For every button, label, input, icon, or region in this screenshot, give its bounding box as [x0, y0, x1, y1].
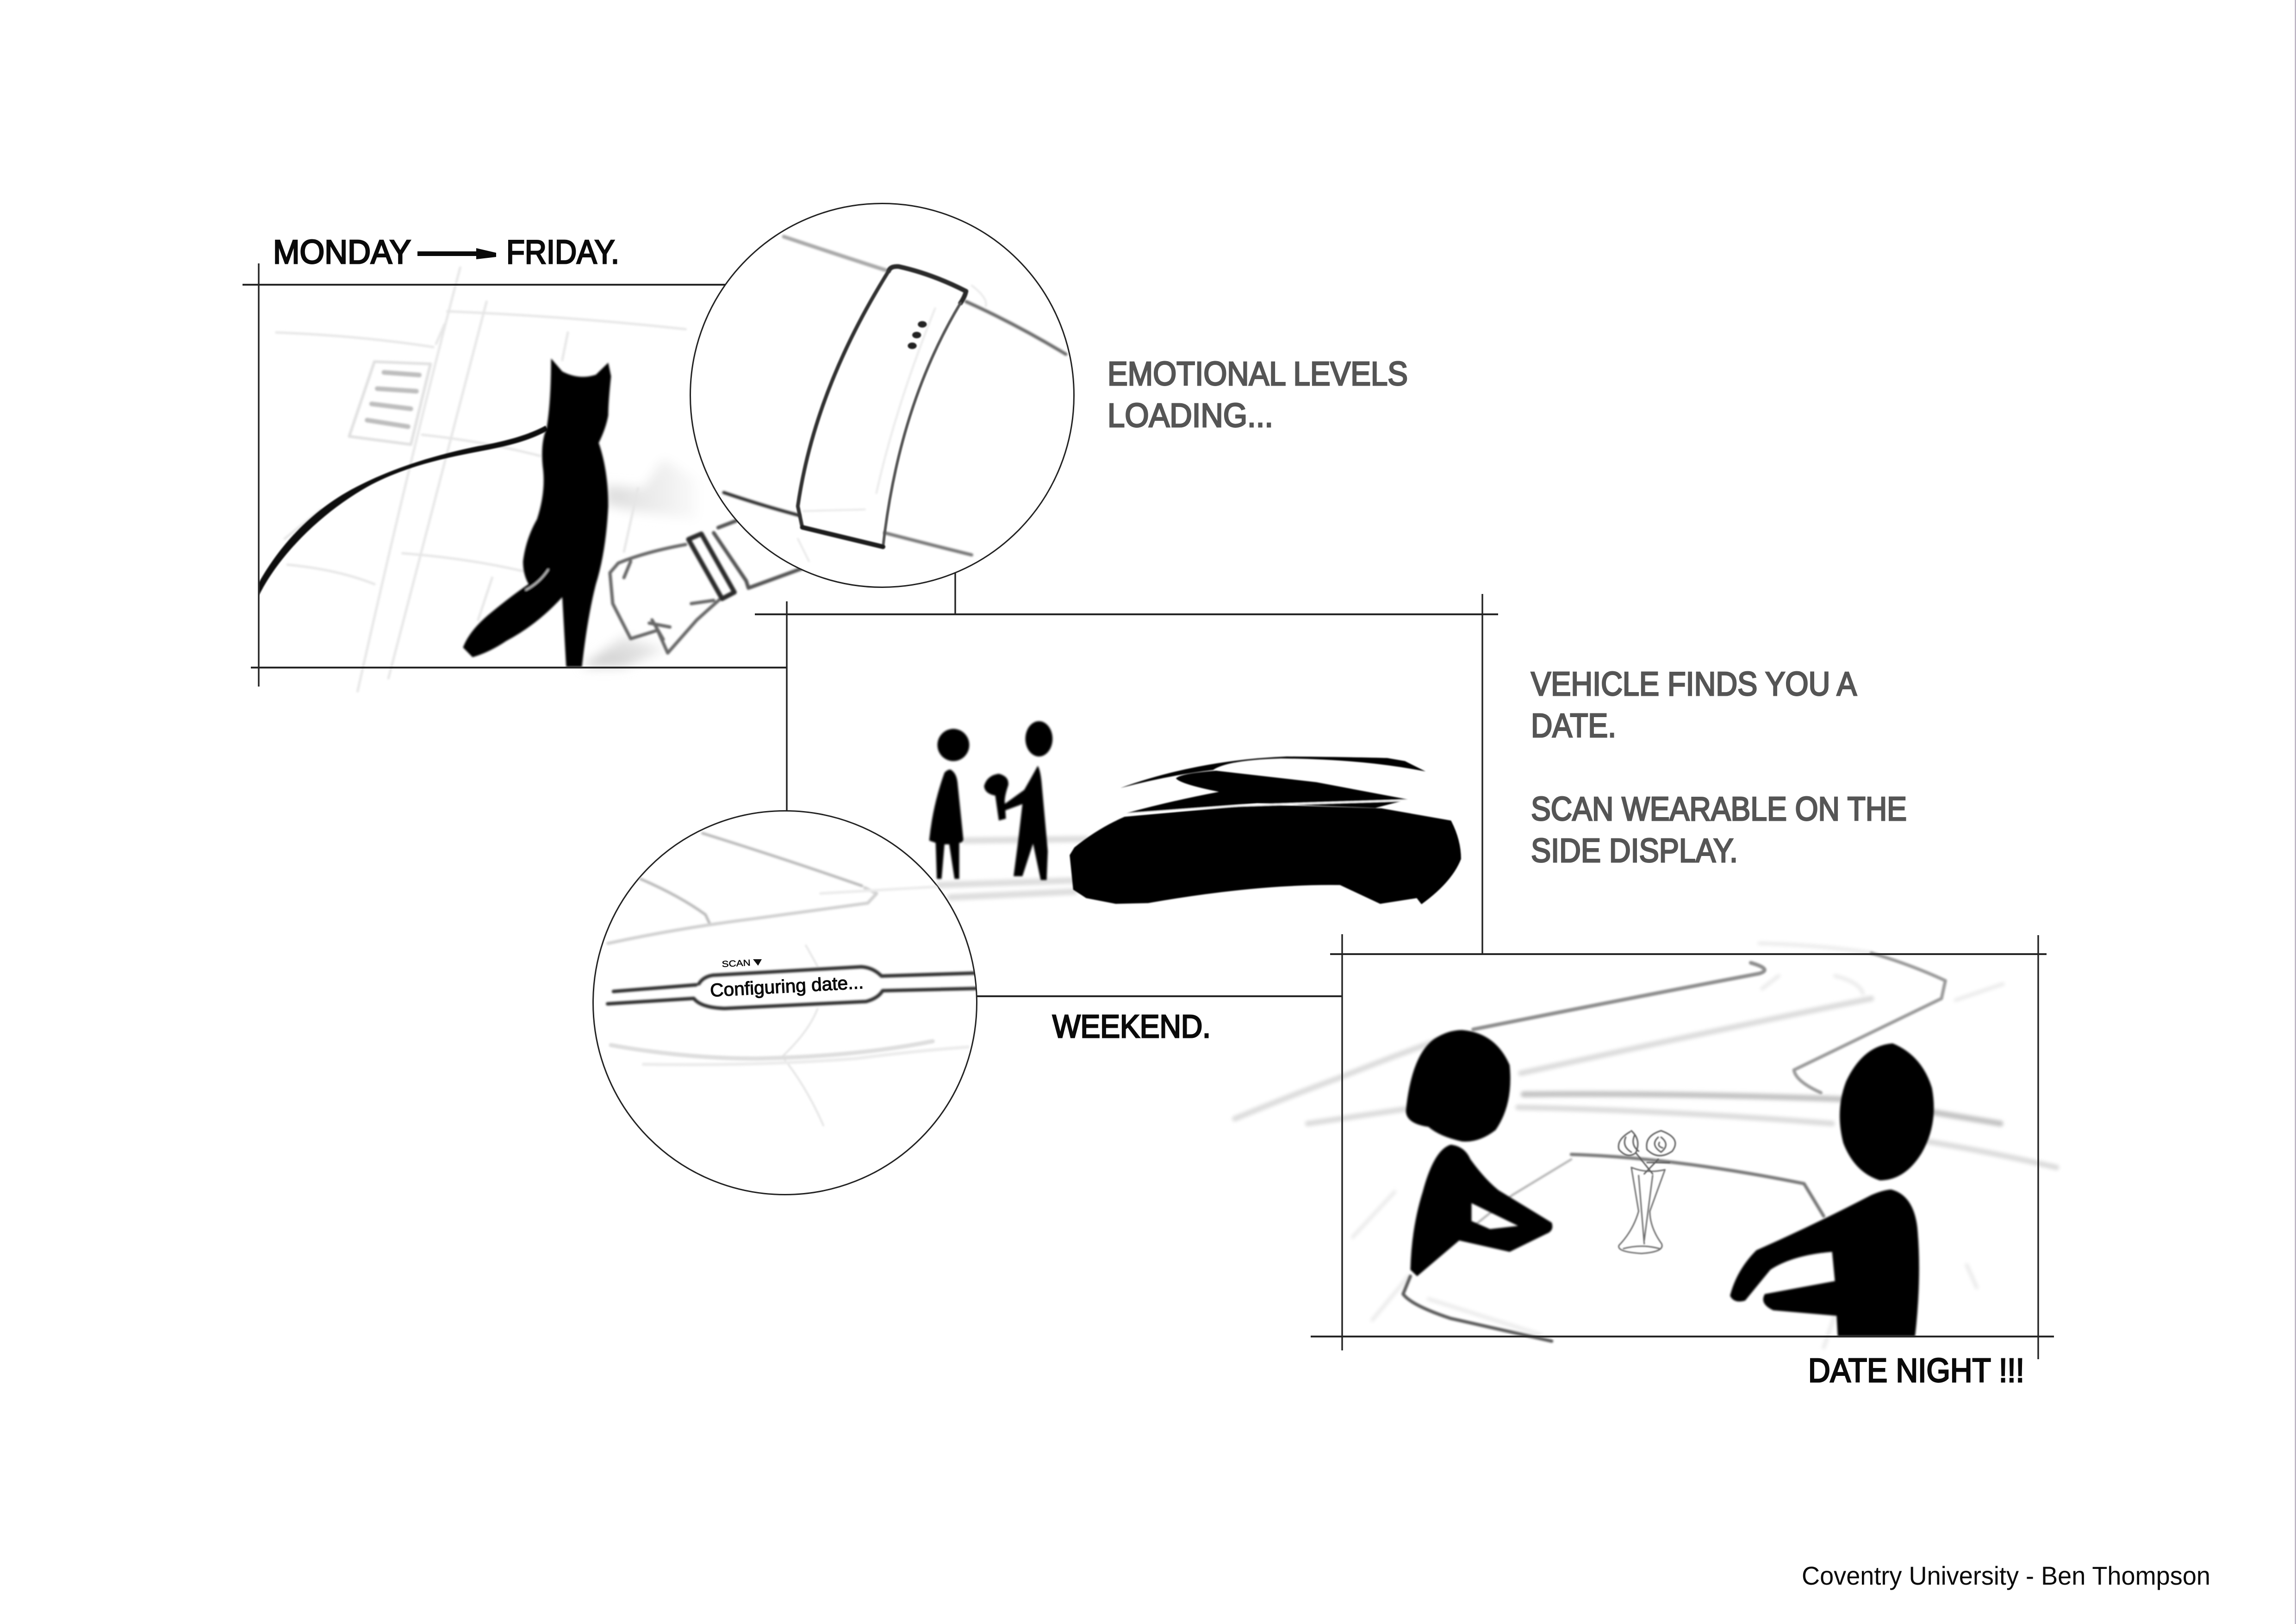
scan label: SCAN	[722, 958, 751, 969]
text: vehicle finds you a date: VEHICLE FINDS YOU A	[1531, 666, 1857, 703]
text: emotional levels loading: EMOTIONAL LEVELS	[1108, 356, 1408, 393]
text: vehicle finds you a date: DATE.	[1531, 707, 1616, 744]
text: vehicle finds you a date: SCAN WEARABLE ON THE	[1531, 791, 1907, 828]
heading: weekend: WEEKEND.	[1052, 1008, 1211, 1044]
panel: weekend sketch	[929, 721, 1461, 904]
figure: woman	[929, 729, 969, 879]
icon: scan triangle	[753, 959, 762, 966]
heading: Monday to Friday	[273, 234, 619, 271]
panel: Monday to Friday sketch	[259, 268, 803, 691]
text: emotional levels loading: LOADING...	[1108, 397, 1273, 434]
panel: date night sketch	[1235, 943, 2056, 1348]
icon: vase with roses	[1618, 1131, 1675, 1254]
circle: wearable close-up	[691, 204, 1074, 587]
arm sketch strokes	[724, 237, 1066, 562]
icon: car silhouette	[1070, 756, 1461, 904]
background sketch: corridor lines and vent	[276, 268, 685, 691]
heading: Monday to Friday: MONDAY	[273, 234, 411, 271]
ground strokes	[939, 839, 1086, 897]
figure: person right	[1730, 1043, 1934, 1337]
circle: side display close-up	[593, 811, 979, 1194]
page edge line	[2295, 0, 2296, 1624]
car body sketch strokes	[608, 833, 968, 1126]
heading: date night: DATE NIGHT !!!	[1808, 1352, 2024, 1389]
shaded floor patches	[582, 459, 697, 667]
credit: Coventry University - Ben Thompson	[1802, 1561, 2210, 1590]
icon: hand with wearable	[610, 521, 803, 653]
icon: wristband with three dots	[798, 267, 966, 547]
icon: black cat	[463, 358, 611, 667]
text: vehicle finds you a date: SIDE DISPLAY.	[1531, 832, 1738, 869]
storyboard frame lines	[243, 263, 2054, 1359]
text: emotional levels loading	[1108, 356, 1408, 434]
figure: person left	[1406, 1030, 1552, 1276]
leash	[259, 425, 548, 595]
arrow	[417, 248, 496, 259]
display text: Configuring date...	[709, 972, 864, 1001]
heading: Monday to Friday: FRIDAY.	[506, 234, 619, 271]
background sketch: pale car interior lines	[1235, 943, 2056, 1348]
background sketch: darker table and window lines	[1403, 953, 1945, 1341]
figure: man with bouquet	[984, 721, 1052, 880]
side display pill	[608, 967, 979, 1008]
text: vehicle finds you a date	[1531, 666, 1907, 869]
